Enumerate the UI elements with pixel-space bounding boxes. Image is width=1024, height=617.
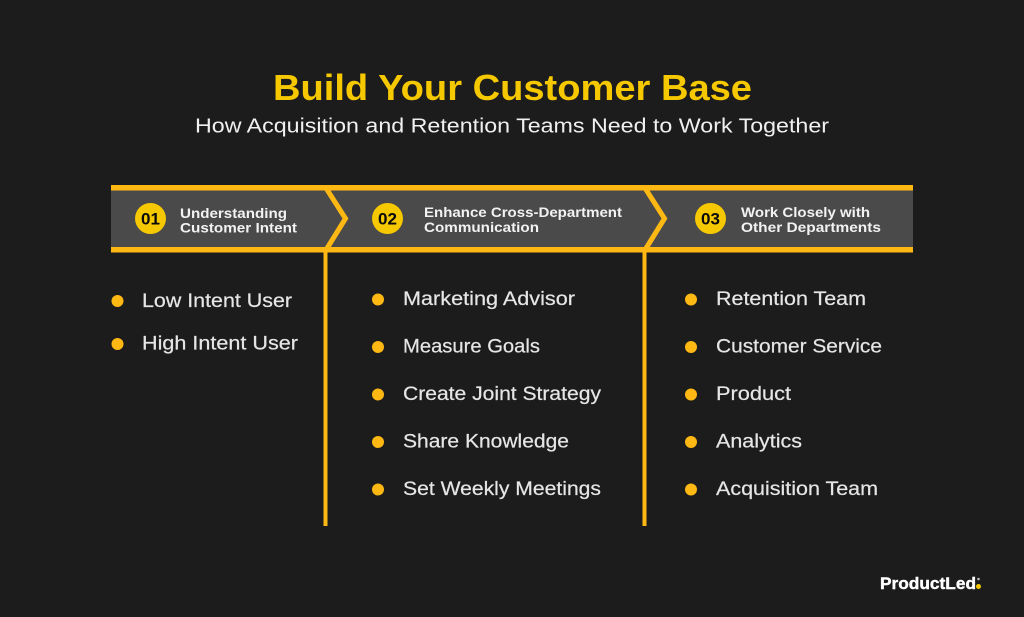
process band with three chevron steps: [111, 185, 913, 252]
list: cross-department communication: [372, 289, 602, 500]
column divider 1: [324, 250, 328, 526]
list: cross-department communication: Measure Goals: [403, 336, 540, 358]
list: other departments: [685, 289, 882, 500]
step 3 header: Other Departments: [741, 220, 881, 235]
list: cross-department communication: Create Joint Strategy: [403, 384, 602, 405]
step 2 header: Enhance Cross-Department: [424, 205, 623, 220]
step 3 header: 03: [701, 210, 720, 228]
subtitle: How Acquisition and Retention Teams Need to Work Together: [195, 116, 829, 138]
step 1 header: [135, 203, 298, 236]
step 2 header: [372, 203, 623, 235]
list: customer intent: [112, 291, 299, 354]
list: other departments: Analytics: [716, 432, 802, 452]
step 2 header: 02: [378, 210, 397, 228]
list: customer intent: High Intent User: [142, 334, 299, 354]
list: cross-department communication: Set Weekly Meetings: [403, 479, 601, 500]
list: customer intent: Low Intent User: [142, 291, 293, 312]
list: other departments: Acquisition Team: [716, 479, 878, 500]
list: other departments: Customer Service: [716, 336, 882, 358]
step 3 header: Work Closely with: [741, 205, 870, 220]
list: other departments: Retention Team: [716, 289, 866, 310]
list: cross-department communication: Marketing Advisor: [403, 289, 576, 310]
step 3 header: [695, 203, 881, 235]
step 2 header: Communication: [424, 220, 539, 235]
title: Build Your Customer Base: [273, 67, 752, 108]
list: cross-department communication: Share Knowledge: [403, 432, 569, 452]
logo: ProductLed: ProductLed: [880, 575, 976, 593]
column divider 2: [642, 250, 646, 526]
step 1 header: Understanding: [180, 206, 287, 221]
list: other departments: Product: [716, 384, 792, 405]
step 1 header: Customer Intent: [180, 220, 298, 236]
step 1 header: 01: [141, 210, 160, 228]
